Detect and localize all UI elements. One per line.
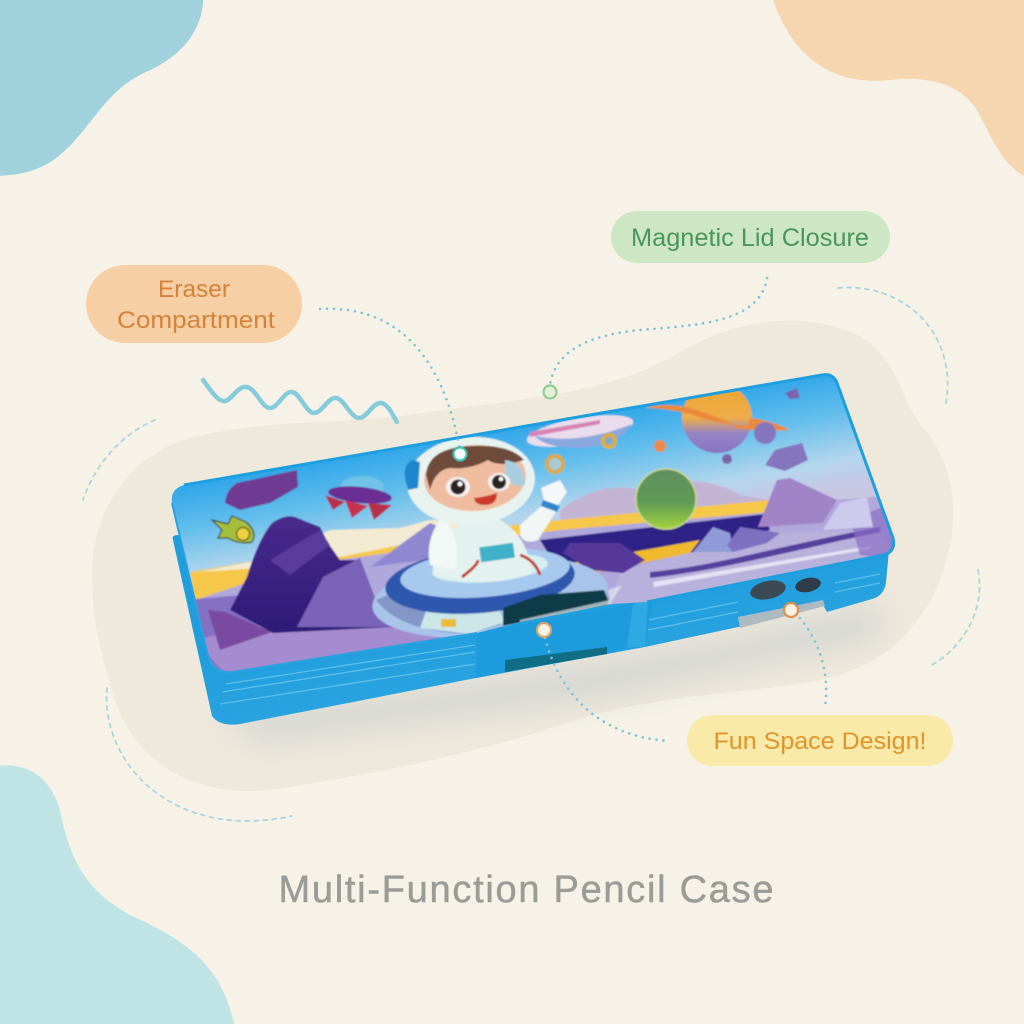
callout: magnetic lid closure — [611, 211, 890, 263]
squiggle accent — [203, 380, 397, 422]
blob: top right peach — [770, 0, 1024, 180]
floating rocks — [225, 470, 298, 510]
leader line: magnetic lid closure — [550, 278, 767, 385]
comet — [212, 516, 254, 543]
marker: teal on helmet — [454, 448, 466, 460]
callout: eraser compartment — [86, 265, 302, 343]
callout: eraser compartment: Compartment — [117, 307, 275, 334]
horizon bands — [192, 496, 892, 601]
callout: fun space design: Fun Space Design! — [714, 728, 926, 755]
decorative dashed curves — [83, 287, 980, 821]
case base — [173, 535, 890, 725]
marker: orange on sharpener — [784, 603, 798, 617]
product: pencil case — [160, 360, 910, 745]
ground — [205, 625, 444, 672]
leader line: eraser compartment — [320, 309, 460, 450]
lid rim — [184, 375, 894, 602]
leader line: fun space design, latch — [545, 638, 668, 741]
blob: top left teal — [0, 0, 203, 176]
backdrop blob behind product — [92, 321, 953, 791]
marker: orange on latch — [537, 623, 551, 637]
lid artwork — [172, 376, 892, 672]
title: Multi-Function Pencil Case — [278, 869, 774, 911]
callout: fun space design — [687, 715, 953, 766]
astronaut — [404, 433, 567, 582]
planet — [645, 383, 790, 453]
mountain — [230, 516, 393, 633]
dark latch window — [503, 590, 609, 626]
UFO small — [325, 476, 393, 520]
gloss — [520, 585, 622, 626]
green globe — [636, 469, 696, 529]
leader line: fun space design, sharpener — [800, 618, 826, 708]
flying saucer — [372, 548, 608, 638]
marker: green — [544, 386, 556, 398]
callout: magnetic lid closure: Magnetic Lid Closure — [631, 224, 869, 252]
callout: eraser compartment: Eraser — [158, 276, 230, 303]
blob: bottom left teal — [0, 765, 236, 1024]
case shadow — [215, 600, 885, 745]
plane — [525, 409, 635, 474]
sharpener holes — [749, 575, 822, 603]
distant hills — [560, 481, 767, 520]
